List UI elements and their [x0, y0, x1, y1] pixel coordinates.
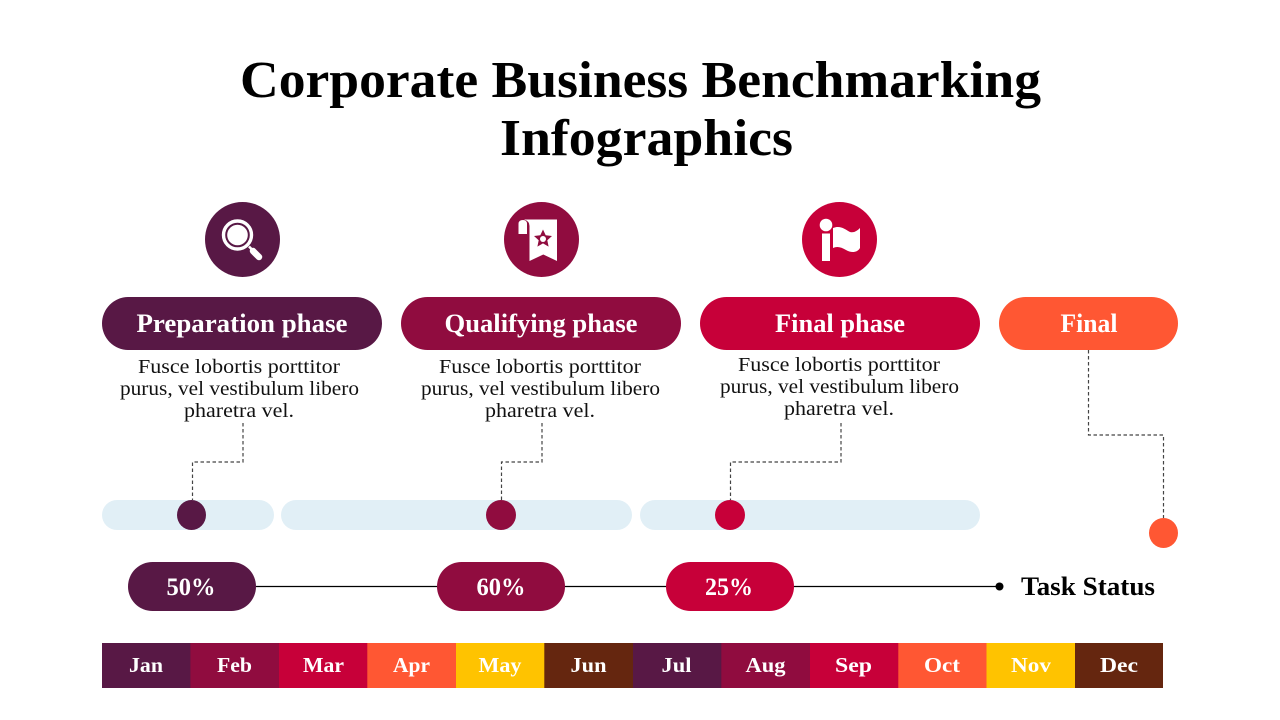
status pill: 60% — [437, 562, 565, 611]
month timeline: Aug — [746, 653, 786, 677]
phase pill: Final phase: Final phase — [775, 309, 905, 338]
month timeline: May — [478, 653, 522, 677]
phase pill: Preparation phase: Preparation phase — [136, 309, 348, 338]
icon: magnifying glass — [205, 202, 280, 277]
status pill: 60%: 60% — [476, 574, 526, 601]
progress track: third segment — [640, 500, 980, 530]
phase pill: Final phase — [700, 297, 980, 350]
text block: qualifying description: Fusce lobortis porttitor — [439, 356, 641, 378]
month timeline: Feb — [217, 653, 252, 677]
text block: preparation description: Fusce lobortis porttitor — [138, 356, 340, 378]
month timeline: Sep — [835, 653, 872, 677]
dashed connector: final — [1088, 350, 1164, 518]
title — [240, 52, 1041, 167]
month timeline: Oct — [924, 653, 960, 677]
icon: flag with pole — [802, 202, 877, 277]
marker: qualifying — [486, 500, 516, 530]
text block: preparation description — [120, 356, 359, 422]
text block: qualifying description: purus, vel vestibulum libero — [421, 378, 660, 400]
month timeline: Jul — [662, 653, 692, 677]
phase pill: Qualifying phase — [401, 297, 681, 350]
phase pill: Final: Final — [1060, 309, 1118, 338]
progress track: second segment — [281, 500, 632, 530]
status line — [256, 582, 1004, 590]
status pill: 25% — [666, 562, 794, 611]
month timeline: Apr — [393, 653, 430, 677]
month timeline: Nov — [1011, 653, 1052, 677]
phase pill: Qualifying phase: Qualifying phase — [444, 309, 638, 338]
marker: final — [1149, 518, 1178, 548]
status pill: 50% — [128, 562, 256, 611]
marker: preparation — [177, 500, 206, 530]
text block: preparation description: pharetra vel. — [184, 400, 294, 422]
dashed connector: qualifying — [502, 423, 542, 500]
text block: final phase description — [720, 354, 959, 420]
title: Corporate Business Benchmarking — [240, 52, 1041, 109]
phase pill: Final — [999, 297, 1178, 350]
progress track: first segment — [102, 500, 274, 530]
month timeline: Jan — [129, 653, 163, 677]
phase pill: Preparation phase — [102, 297, 382, 350]
dashed connector: final phase — [730, 423, 841, 500]
month timeline: Mar — [303, 653, 344, 677]
month timeline: Jun — [570, 653, 607, 677]
text block: final phase description: pharetra vel. — [784, 398, 894, 420]
text block: final phase description: Fusce lobortis porttitor — [738, 354, 940, 376]
marker: final phase — [715, 500, 745, 530]
dashed connector: preparation — [192, 423, 243, 500]
text block: qualifying description: pharetra vel. — [485, 400, 595, 422]
text block: final phase description: purus, vel vestibulum libero — [720, 376, 959, 398]
status pill: 25%: 25% — [705, 574, 753, 601]
month timeline — [102, 643, 1163, 688]
text block: qualifying description — [421, 356, 660, 422]
title: Infographics — [500, 110, 793, 167]
status pill: 50%: 50% — [166, 574, 216, 601]
label: Task Status: Task Status — [1021, 572, 1155, 601]
month timeline: Dec — [1100, 653, 1138, 677]
icon: bookmark scroll with star — [504, 202, 579, 277]
text block: preparation description: purus, vel vestibulum libero — [120, 378, 359, 400]
